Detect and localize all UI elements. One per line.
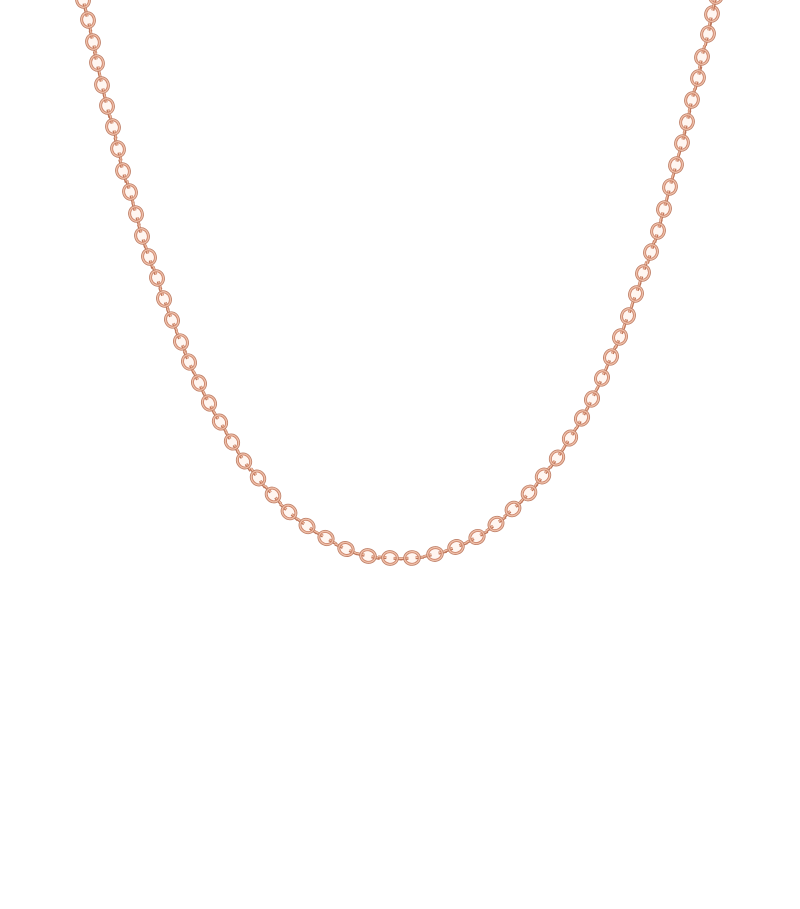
chain xyxy=(73,0,726,566)
left strand of chain xyxy=(73,0,403,566)
right strand of chain xyxy=(400,0,726,566)
